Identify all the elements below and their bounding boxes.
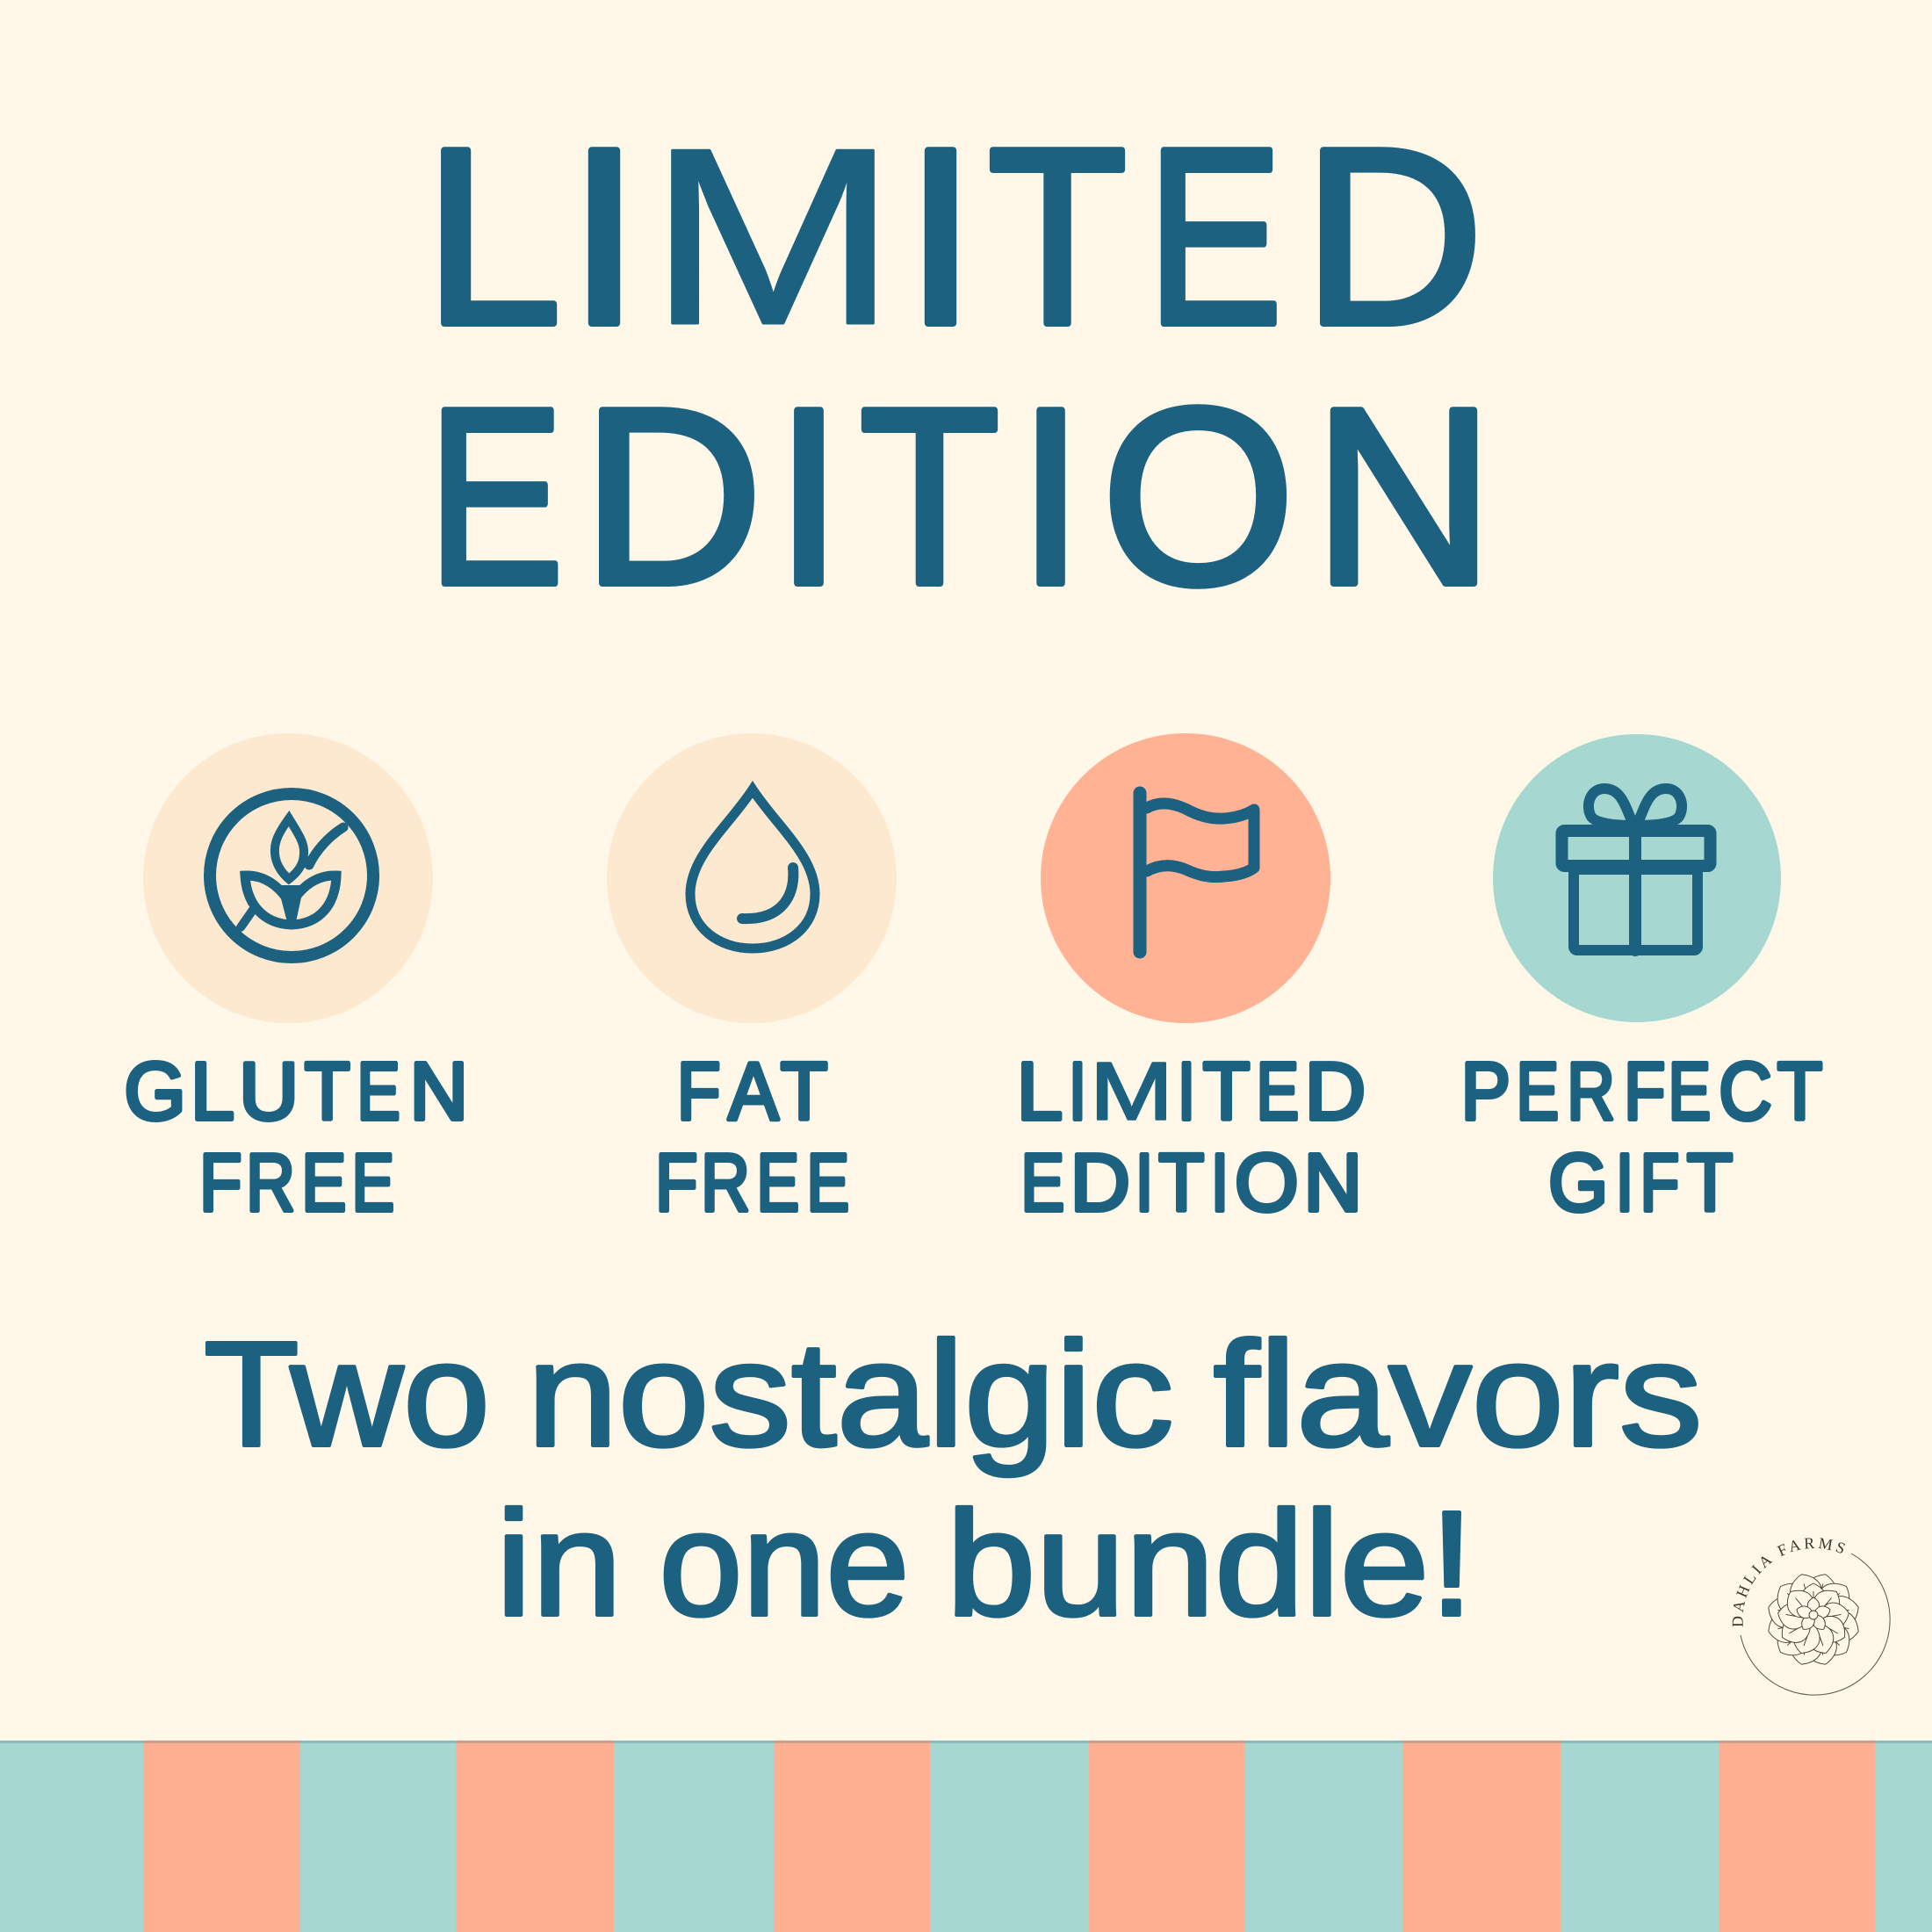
label: fat free: E — [806, 1136, 849, 1228]
icon: limited edition flag — [1041, 733, 1330, 1023]
tagline: in — [495, 1481, 622, 1647]
label: perfect gift: G — [1548, 1136, 1608, 1228]
label: gluten free: R — [246, 1136, 295, 1228]
title: E — [1147, 96, 1282, 377]
label: perfect gift: I — [1616, 1136, 1633, 1228]
label: limited edition — [1017, 1045, 1366, 1228]
title: D — [1303, 96, 1484, 377]
label: perfect gift: T — [1687, 1136, 1733, 1228]
label: limited edition: E — [1256, 1045, 1299, 1136]
icon: perfect gift — [1493, 734, 1781, 1022]
label: gluten free: E — [357, 1045, 400, 1136]
label: fat free: E — [757, 1136, 799, 1228]
tagline: flavors — [1214, 1311, 1702, 1478]
label: gluten free: E — [301, 1136, 346, 1228]
label: gluten free: U — [239, 1045, 299, 1136]
label: perfect gift: E — [1669, 1045, 1711, 1136]
label: fat free: T — [781, 1045, 827, 1136]
label: limited edition: I — [1135, 1136, 1153, 1228]
label: fat free: F — [677, 1045, 721, 1136]
logo: dahlia farms: DAHLIA FARMS — [1732, 1538, 1845, 1626]
label: limited edition: M — [1090, 1045, 1173, 1136]
title: L — [424, 96, 562, 377]
label: fat free — [655, 1045, 849, 1228]
label: limited edition: N — [1303, 1136, 1362, 1228]
label: fat free: R — [701, 1136, 750, 1228]
tagline: bundle! — [947, 1481, 1474, 1647]
title: I — [775, 356, 843, 637]
label: gluten free: E — [351, 1136, 394, 1228]
label: perfect gift: R — [1567, 1045, 1615, 1136]
logo: dahlia farms — [1732, 1538, 1891, 1696]
title: I — [904, 96, 977, 377]
label: limited edition: I — [1211, 1136, 1229, 1228]
label: limited edition: O — [1235, 1136, 1299, 1228]
label: perfect gift: F — [1640, 1136, 1679, 1228]
title: T — [988, 96, 1128, 377]
tagline: nostalgic — [527, 1311, 1173, 1478]
label: limited edition: T — [1158, 1136, 1204, 1228]
label: gluten free: F — [199, 1136, 242, 1228]
title: O — [1101, 356, 1295, 637]
title: E — [428, 356, 564, 637]
label: limited edition: D — [1305, 1045, 1366, 1136]
icon: fat free — [607, 733, 897, 1023]
title: D — [582, 356, 763, 637]
tagline — [204, 1311, 1702, 1647]
title: I — [567, 96, 641, 377]
title: T — [860, 356, 999, 637]
label: limited edition: E — [1020, 1136, 1064, 1228]
label: fat free: F — [655, 1136, 697, 1228]
icon: gluten free — [143, 733, 433, 1023]
label: perfect gift: T — [1777, 1045, 1822, 1136]
label: limited edition: L — [1017, 1045, 1063, 1136]
title: I — [1018, 356, 1084, 637]
tagline: Two — [204, 1311, 490, 1478]
label: perfect gift — [1461, 1045, 1822, 1228]
label: gluten free: L — [191, 1045, 234, 1136]
label: perfect gift: P — [1461, 1045, 1510, 1136]
title — [424, 96, 1494, 637]
label: limited edition: I — [1178, 1045, 1195, 1136]
label: perfect gift: C — [1719, 1045, 1772, 1136]
label: perfect gift: E — [1516, 1045, 1559, 1136]
label: limited edition: T — [1203, 1045, 1250, 1136]
label: gluten free: G — [124, 1045, 186, 1136]
label: gluten free — [124, 1045, 468, 1228]
title: M — [648, 96, 898, 377]
striped band — [0, 1741, 1932, 1932]
icon: dahlia flower — [1764, 1570, 1863, 1669]
label: limited edition: D — [1071, 1136, 1130, 1228]
label: perfect gift: F — [1624, 1045, 1665, 1136]
label: gluten free: T — [305, 1045, 350, 1136]
title: N — [1313, 356, 1495, 637]
label: gluten free: N — [409, 1045, 468, 1136]
label: limited edition: I — [1069, 1045, 1086, 1136]
tagline: one — [659, 1481, 910, 1647]
label: fat free: A — [728, 1045, 779, 1136]
